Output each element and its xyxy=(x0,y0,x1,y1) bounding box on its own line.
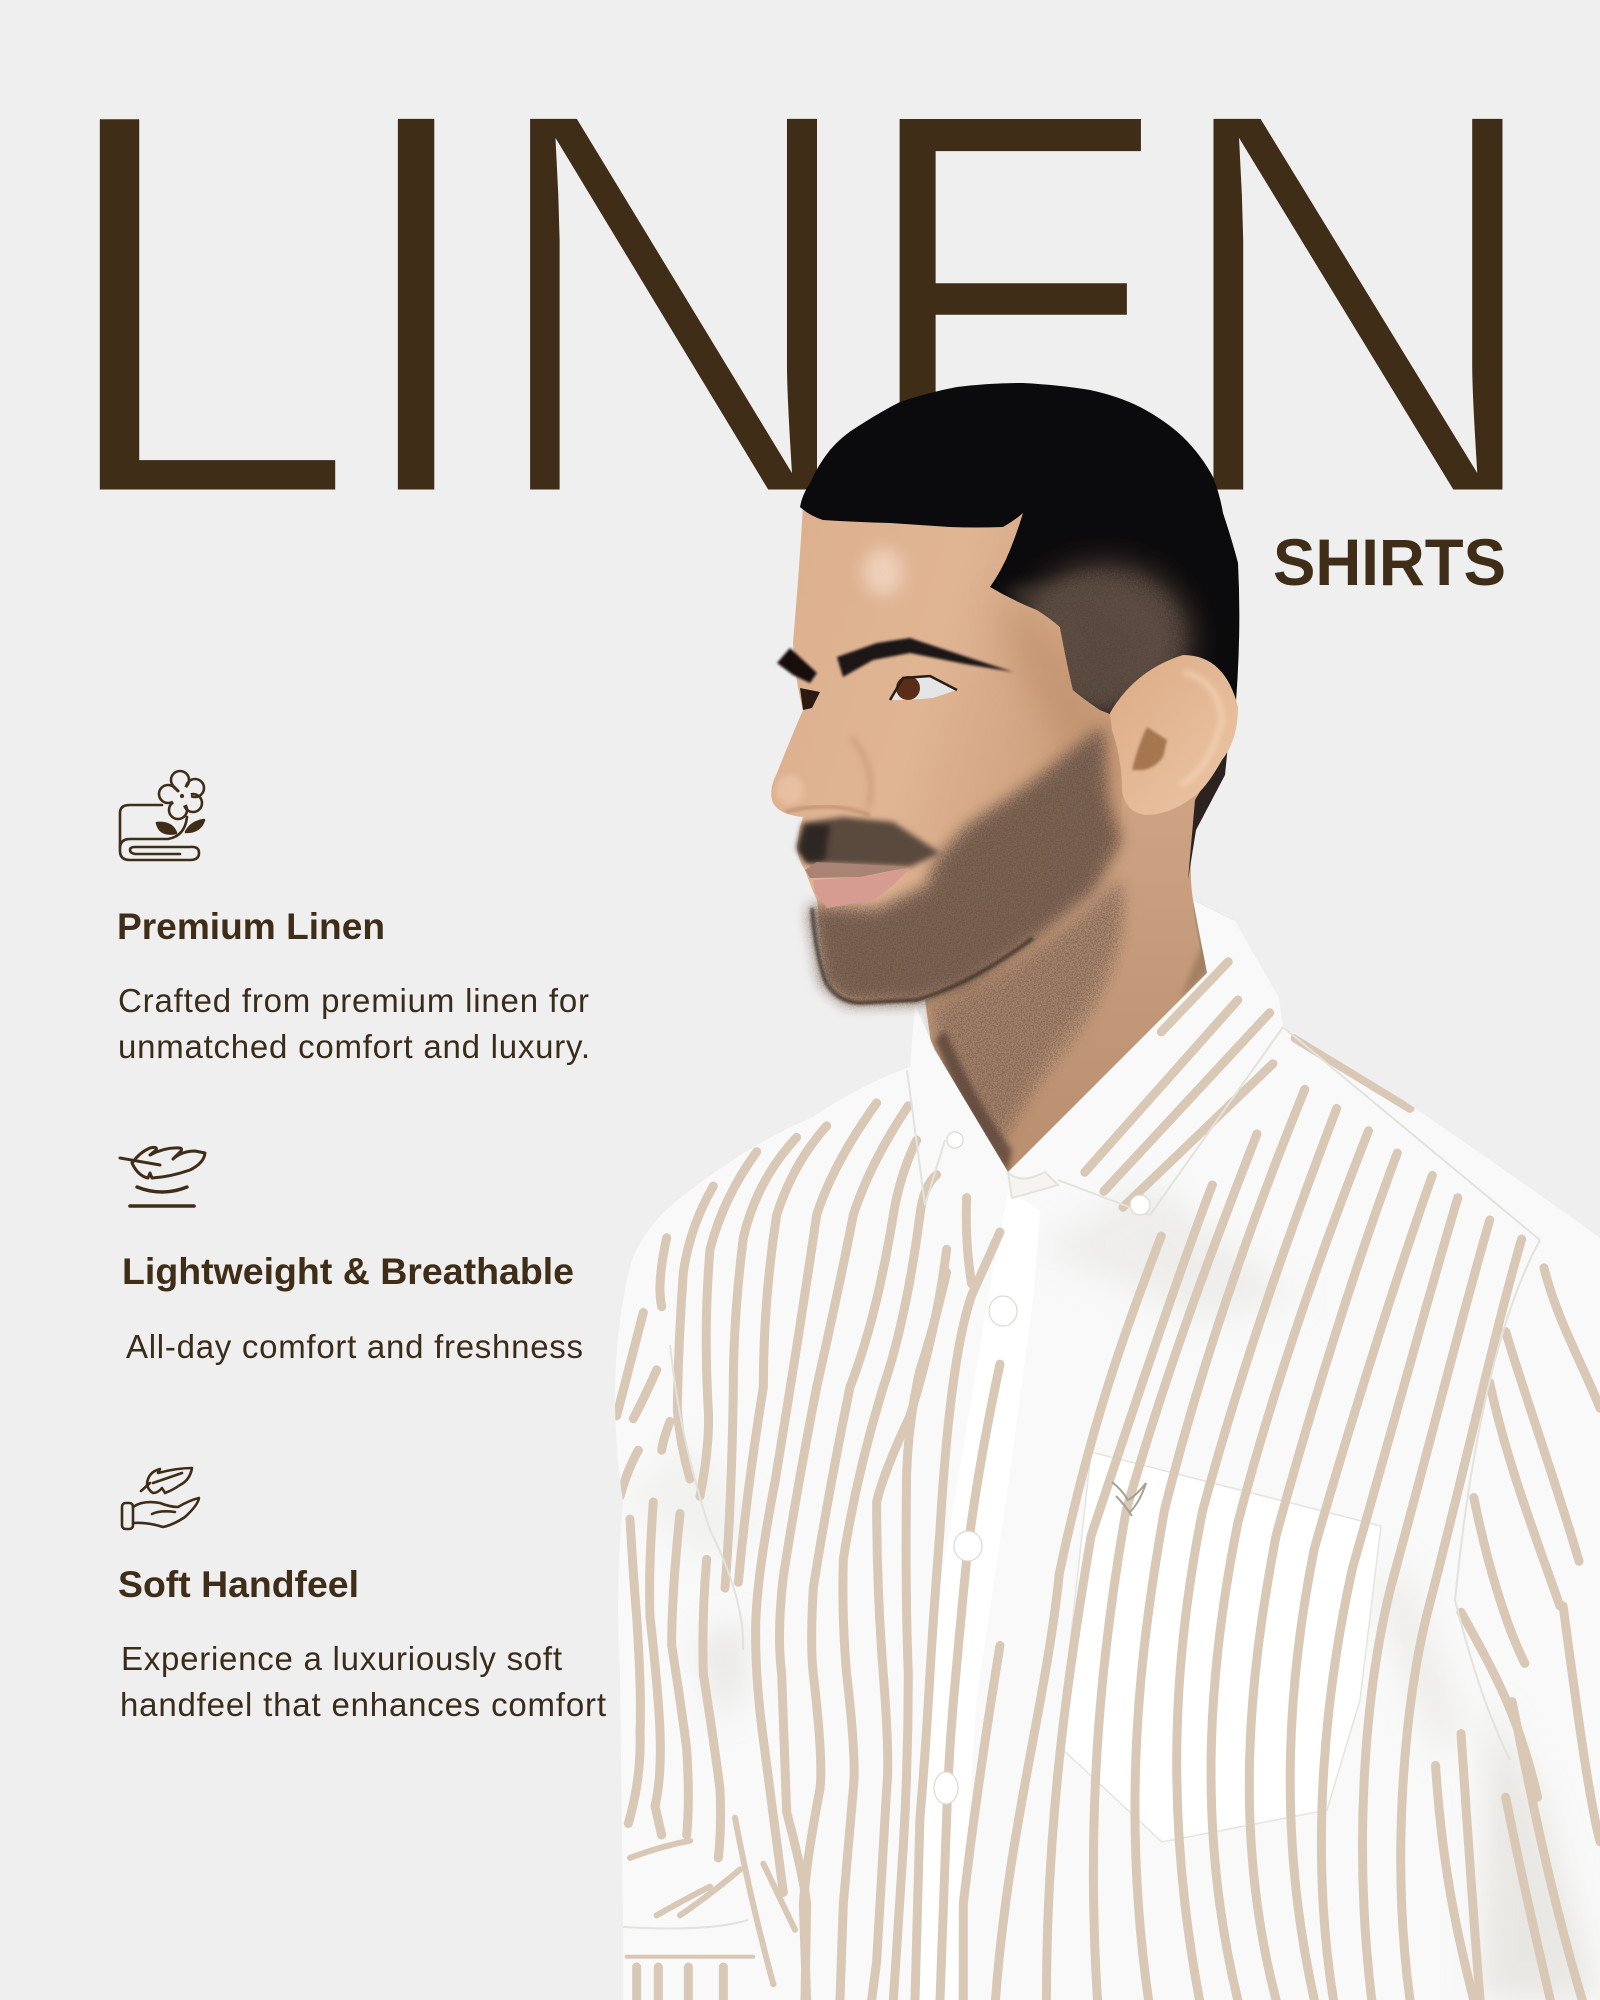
shirt xyxy=(600,880,1600,2000)
chin edge xyxy=(812,908,1033,1003)
face shading xyxy=(776,548,1100,815)
description: soft handfeel: Experience a luxuriously soft xyxy=(121,1640,562,1677)
title: LINEN: N xyxy=(1161,0,1555,617)
head xyxy=(771,375,1250,1004)
back neck hair xyxy=(1188,745,1228,880)
far eye xyxy=(800,688,820,710)
title: LINEN xyxy=(47,0,1555,618)
icon: folded fabric with flower xyxy=(120,771,204,860)
placket xyxy=(913,1191,1040,2000)
ear xyxy=(1110,655,1238,815)
chest logo xyxy=(1112,1482,1146,1516)
near eye xyxy=(890,676,957,700)
shirt seams and collar edges xyxy=(623,1027,1540,1928)
title: LINEN: L xyxy=(47,0,360,614)
description: soft handfeel xyxy=(120,1640,606,1723)
title: LINEN: I xyxy=(338,0,494,618)
feature: lightweight and breathable xyxy=(120,1147,583,1365)
face xyxy=(771,500,1125,1004)
mustache xyxy=(797,817,940,867)
description: premium linen: Crafted from premium linen for xyxy=(118,982,589,1019)
title: LINEN: E xyxy=(856,0,1175,612)
buttons xyxy=(934,1132,1150,1804)
subtitle: SHIRTS: SHIRTS xyxy=(1273,525,1506,599)
description: premium linen xyxy=(118,982,590,1065)
photo: man in striped linen shirt xyxy=(600,375,1600,2000)
near eyebrow xyxy=(837,638,1013,677)
feature: soft handfeel xyxy=(118,1468,606,1723)
title: LINEN: N xyxy=(478,0,869,617)
hair xyxy=(800,383,1240,714)
description: lightweight: All-day comfort and freshness xyxy=(126,1328,583,1365)
heading: Premium Linen: Premium Linen xyxy=(117,906,385,947)
feature: premium linen xyxy=(117,771,590,1065)
icon: feather above line xyxy=(120,1147,205,1206)
pocket xyxy=(1059,1452,1381,1842)
description: premium linen: unmatched comfort and luxury. xyxy=(118,1028,590,1065)
neck xyxy=(925,770,1233,1180)
description: soft handfeel: handfeel that enhances comfort xyxy=(120,1686,606,1723)
icon: hand with leaf xyxy=(122,1468,199,1529)
stripes: left body and sleeve xyxy=(617,1103,1000,2000)
ear inner xyxy=(1132,727,1167,770)
beard xyxy=(810,727,1120,1003)
heading: Soft Handfeel: Soft Handfeel xyxy=(118,1564,359,1605)
shirt shading xyxy=(625,1180,1600,2000)
far eyebrow xyxy=(777,648,817,683)
lips xyxy=(805,862,910,908)
heading: Lightweight and Breathable: Lightweight & Breathable xyxy=(122,1251,574,1292)
stripes: chest, collar and right sleeve xyxy=(995,962,1600,2000)
